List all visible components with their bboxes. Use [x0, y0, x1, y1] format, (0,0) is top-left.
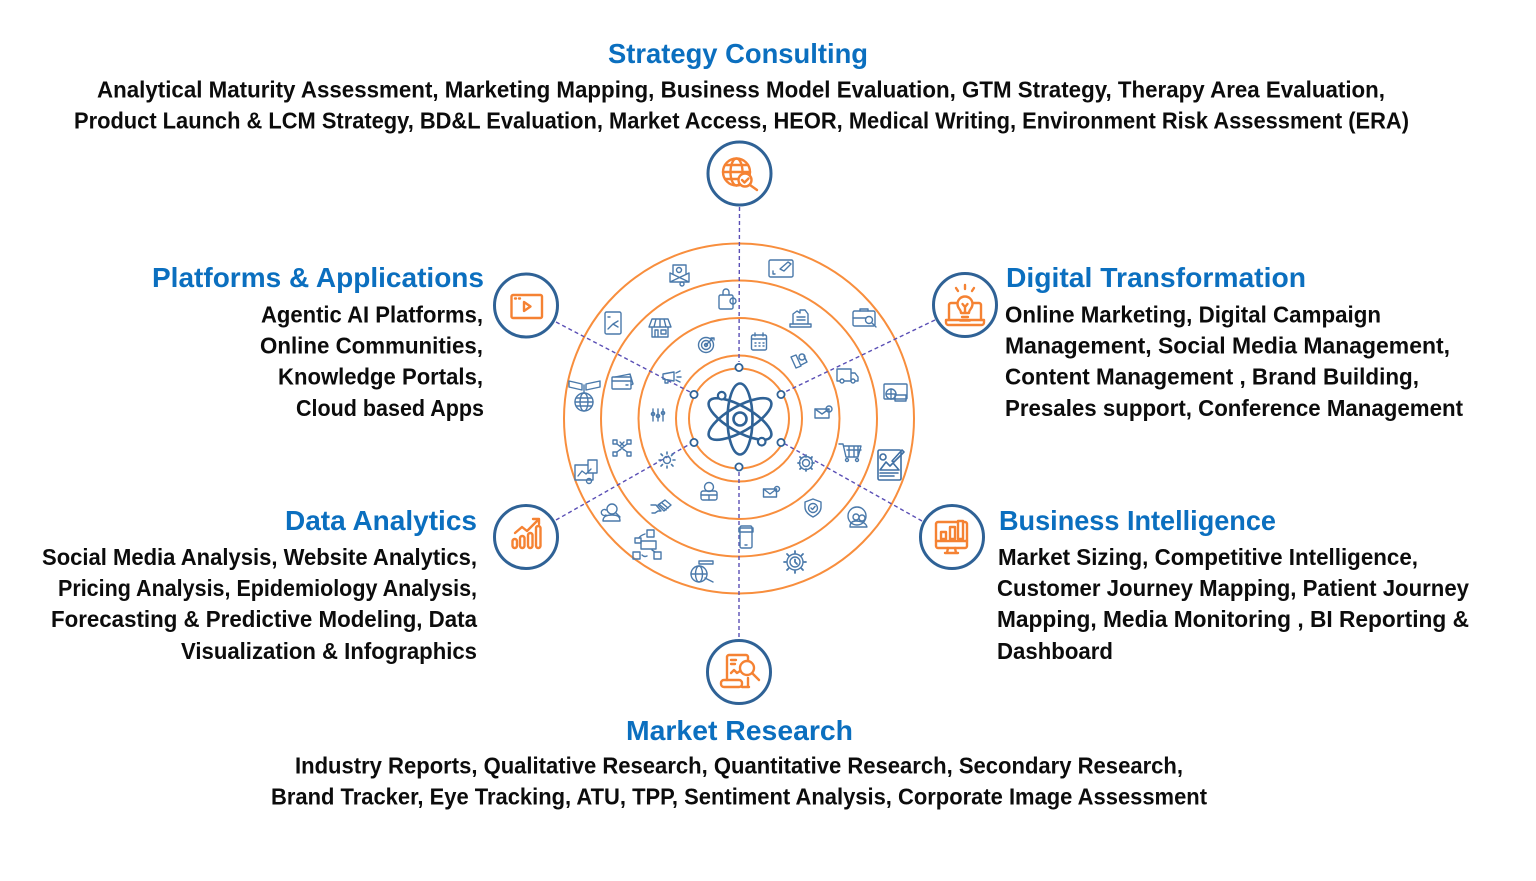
text block: Strategy Consulting services: Product Launch & LCM Strategy, BD&L Evaluation, Market Access, HEOR, Medical Writing, Environment Risk Assessment (ERA)	[74, 108, 1409, 134]
icon: card with pen	[769, 260, 793, 277]
icon: network grid	[613, 440, 631, 456]
icon: envelope with at sign	[670, 265, 689, 286]
text block: Business Intelligence services: Mapping, Media Monitoring , BI Reporting &	[997, 606, 1469, 632]
icon: user	[701, 482, 717, 500]
icon: storefront	[649, 319, 671, 337]
text block: Strategy Consulting services: Analytical Maturity Assessment, Marketing Mapping, Business Model Evaluation, GTM Strategy, Therapy Area Evaluation,	[97, 76, 1385, 102]
icons: outer and inner ring service icons	[569, 260, 907, 582]
icon: shopping bag lock	[719, 289, 736, 309]
text block: Business Intelligence services: Dashboard	[997, 638, 1113, 664]
heading: Business Intelligence: Business Intelligence	[999, 505, 1276, 536]
text block: Platforms and Applications services	[260, 302, 484, 421]
hub: Platforms and Applications video icon	[494, 274, 558, 337]
icon: delivery truck	[837, 369, 858, 383]
connector lines: hubs to centre	[556, 207, 935, 640]
text block: Business Intelligence services: Customer Journey Mapping, Patient Journey	[997, 575, 1469, 601]
icon: target audience	[848, 507, 867, 527]
hub: Market Research document search icon	[708, 640, 770, 704]
hub: Data Analytics bar chart icon	[494, 506, 558, 568]
panel: Market Research text	[271, 715, 1207, 810]
text block: Platforms and Applications services: Agentic AI Platforms,	[261, 302, 483, 328]
text block: Data Analytics services: Forecasting & Predictive Modeling, Data	[51, 606, 478, 632]
icon: central atom	[703, 384, 777, 454]
icon: sliders	[651, 409, 665, 421]
panel: Digital Transformation text	[1005, 262, 1463, 421]
icon: tablet graph	[605, 312, 621, 334]
icon: briefcase with magnifier	[853, 309, 876, 327]
text block: Strategy Consulting services	[74, 76, 1409, 134]
icon: map pin	[791, 354, 807, 368]
icon: people network	[633, 530, 661, 559]
icon: gear with clock	[784, 551, 806, 573]
icon: mail with badge	[815, 406, 832, 418]
icon: image document	[878, 450, 904, 480]
hub: Business Intelligence monitor icon	[920, 506, 984, 568]
icon: gear	[798, 455, 814, 471]
panel: Strategy Consulting text	[74, 38, 1409, 134]
panel: Platforms and Applications text	[152, 262, 484, 421]
icon: world on screen	[884, 384, 907, 401]
icon: shield check	[805, 499, 821, 517]
text block: Market Research services	[271, 752, 1207, 810]
text block: Platforms and Applications services: Knowledge Portals,	[278, 364, 483, 390]
hub: Digital Transformation laptop bulb icon	[934, 274, 996, 336]
connector nodes on inner ring	[690, 364, 785, 471]
text block: Digital Transformation services: Online Marketing, Digital Campaign	[1005, 302, 1381, 328]
icon: sun gear	[659, 452, 675, 468]
icon: calendar	[752, 333, 766, 350]
hub: Strategy Consulting globe icon	[708, 142, 771, 205]
text block: Business Intelligence services: Market Sizing, Competitive Intelligence,	[998, 544, 1418, 570]
heading: Platforms and Applications: Platforms & Applications	[152, 262, 484, 293]
text block: Market Research services: Brand Tracker, Eye Tracking, ATU, TPP, Sentiment Analysis, Corporate Image Assessment	[271, 784, 1207, 810]
text block: Platforms and Applications services: Cloud based Apps	[296, 395, 484, 421]
icon: credit cards	[612, 374, 633, 389]
panel: Data Analytics text	[42, 505, 478, 664]
text block: Market Research services: Industry Reports, Qualitative Research, Quantitative Research, Secondary Research,	[295, 752, 1183, 778]
icon: handshake	[651, 500, 671, 513]
text block: Data Analytics services	[42, 544, 478, 664]
text block: Platforms and Applications services: Online Communities,	[260, 332, 483, 358]
icon: globe search	[691, 561, 713, 582]
text block: Digital Transformation services: Presales support, Conference Management	[1005, 395, 1463, 421]
heading: Digital Transformation: Digital Transformation	[1006, 262, 1306, 293]
icon: megaphone	[663, 371, 681, 383]
icon: chart report	[575, 460, 597, 484]
icon: mobile phone store	[739, 526, 753, 548]
panel: Business Intelligence text	[997, 505, 1469, 664]
chart: concentric rings	[564, 244, 914, 594]
text block: Data Analytics services: Social Media Analysis, Website Analytics,	[42, 544, 477, 570]
icon: small mail	[764, 486, 780, 497]
heading: Market Research: Market Research	[626, 715, 853, 746]
heading: Data Analytics: Data Analytics	[285, 505, 477, 536]
text block: Data Analytics services: Visualization & Infographics	[181, 638, 477, 664]
icon: target	[698, 338, 714, 352]
text block: Digital Transformation services	[1005, 302, 1463, 421]
heading: Strategy Consulting: Strategy Consulting	[608, 38, 868, 69]
icon: people search	[601, 504, 620, 521]
icon: globe with megaphones	[569, 381, 600, 411]
text block: Digital Transformation services: Management, Social Media Management,	[1005, 332, 1450, 358]
icon: shopping cart	[839, 444, 861, 462]
text block: Data Analytics services: Pricing Analysis, Epidemiology Analysis,	[58, 575, 477, 601]
text block: Digital Transformation services: Content Management , Brand Building,	[1005, 364, 1419, 390]
icon: building on laptop	[790, 310, 811, 327]
text block: Business Intelligence services	[997, 544, 1469, 664]
